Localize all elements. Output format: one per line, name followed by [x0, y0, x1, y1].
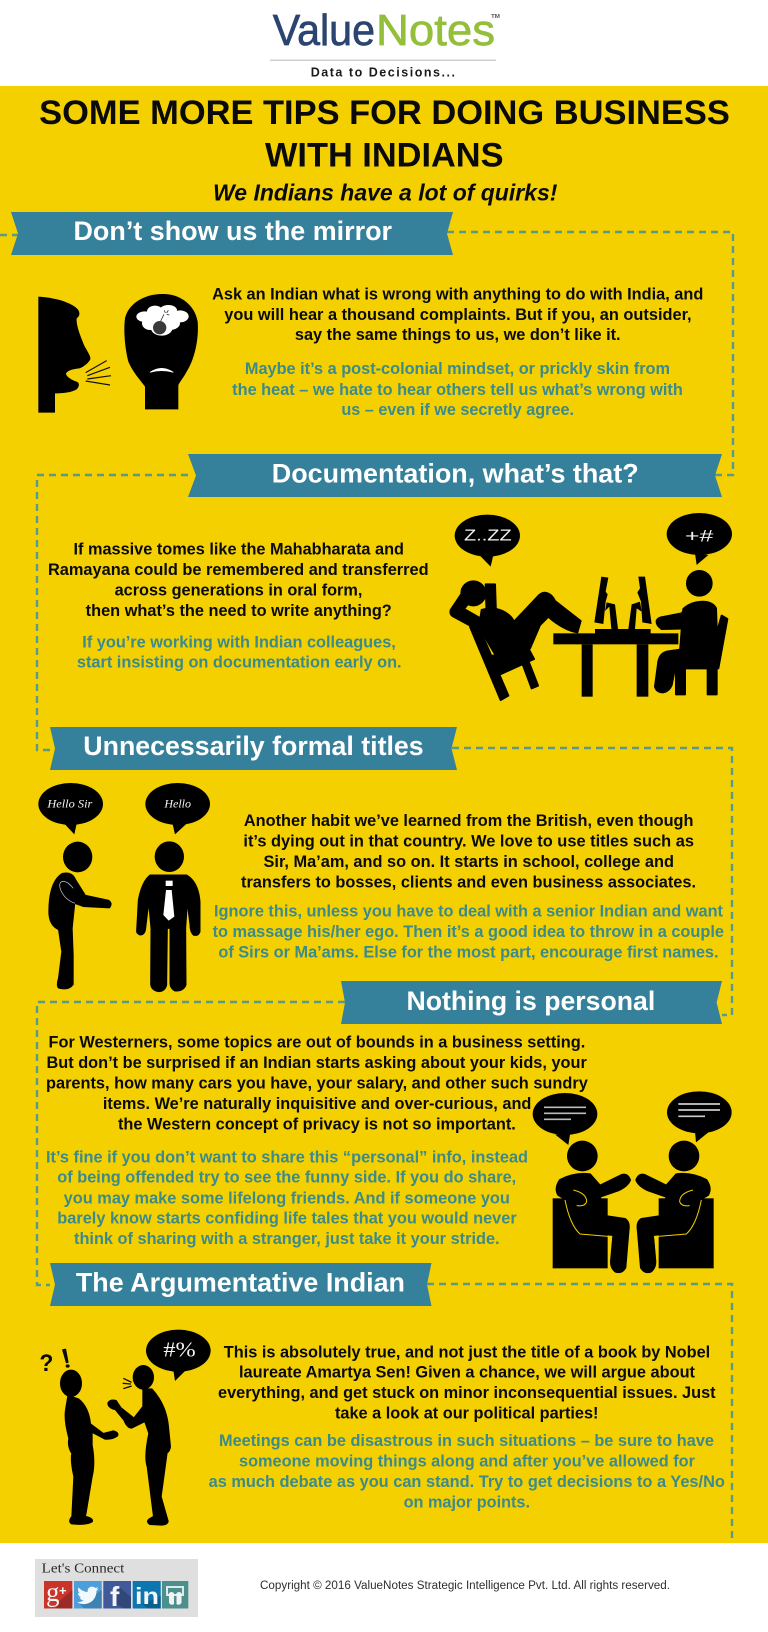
banner: formal titles: [50, 727, 457, 770]
text: argumentative advice: [209, 1432, 725, 1511]
banner: argumentative: The Argumentative Indian: [76, 1268, 405, 1298]
figure: right seated person: [636, 1141, 714, 1272]
text: titles advice: Ignore this, unless you have to deal with a senior Indian and want: [214, 903, 724, 921]
banner: documentation: Documentation, what’s that?: [272, 458, 639, 488]
tagline: Data to Decisions...: [311, 66, 455, 80]
text: personal advice: think of sharing with a stranger, just take it your stride.: [74, 1230, 500, 1248]
text: documentation main: across generations in oral form,: [115, 581, 362, 599]
text: titles main: transfers to bosses, clients and even business associates.: [241, 873, 696, 891]
speech bubble: Hello Sir: [38, 783, 103, 834]
text: personal advice: barely know starts confiding life tales that you would never: [57, 1210, 517, 1228]
text: mirror main: you will hear a thousand complaints. But if you, an outsider,: [224, 306, 692, 324]
banner: documentation: [188, 454, 722, 497]
text: personal advice: [46, 1148, 528, 1248]
text: argumentative main: laureate Amartya Sen! Given a chance, we will argue about: [239, 1364, 696, 1382]
icon: speaking face and frowning head with bomb thought: [38, 294, 198, 413]
title: SOME MORE TIPS FOR DOING BUSINESS: [39, 94, 730, 132]
speech bubble: left: [533, 1093, 597, 1145]
text: titles advice: of Sirs or Ma’ams. Else for the most part, encourage first names.: [218, 943, 718, 961]
text: mirror main: Ask an Indian what is wrong with anything to do with India, and: [212, 286, 703, 304]
banner: mirror: [11, 212, 453, 255]
icon: Twitter: [74, 1581, 102, 1608]
footer: copyright: Copyright © 2016 ValueNotes Strategic Intelligence Pvt. Ltd. All rights reserved.: [260, 1580, 670, 1592]
icon: two office workers at desk: [450, 513, 732, 700]
text: argumentative main: everything, and get stuck on minor inconsequential issues. Just: [218, 1384, 716, 1402]
text: documentation advice: start insisting on documentation early on.: [77, 654, 402, 672]
text: personal main: items. We’re naturally inquisitive and over-curious, and: [103, 1095, 531, 1113]
desk and monitors: [553, 577, 678, 697]
label: Let's Connect: Let's Connect: [42, 1561, 124, 1576]
symbols: question and exclamation marks: ?: [39, 1350, 53, 1377]
speech bubble: Hello: Hello: [163, 798, 191, 810]
icon: Google Plus: +: [59, 1583, 67, 1598]
icon: Facebook: [103, 1581, 131, 1612]
panel: Documentation, what's that?: [48, 454, 732, 700]
figure: reclining man: [450, 581, 581, 700]
icon: two people seated in conversation: [533, 1091, 732, 1272]
icon: LinkedIn: [133, 1581, 161, 1609]
text: titles main: Sir, Ma’am, and so on. It starts in school, college and: [264, 853, 674, 871]
speech bubble: Hello: [145, 783, 210, 834]
banner: argumentative: [50, 1263, 432, 1306]
banner: nothing is personal: [341, 981, 722, 1024]
subtitle: We Indians have a lot of quirks!: [213, 180, 558, 206]
panel: Unnecessarily formal titles: [38, 727, 724, 992]
title: [39, 94, 730, 175]
title: WITH INDIANS: [265, 137, 504, 175]
panel: The Argumentative Indian: [39, 1263, 725, 1525]
text: argumentative advice: on major points.: [404, 1493, 530, 1511]
banner: formal titles: Unnecessarily formal titles: [83, 731, 424, 761]
figure: confused listener: [61, 1371, 117, 1524]
icon: Google Plus: g: [46, 1577, 60, 1607]
logo wordmark: [273, 6, 500, 55]
text: titles main: Another habit we’ve learned from the British, even though: [244, 812, 694, 830]
icon: two people arguing: [39, 1330, 211, 1525]
footer: social box: [35, 1559, 198, 1617]
logo header: [270, 6, 500, 80]
icon: LinkedIn: in: [135, 1583, 159, 1609]
text: titles advice: [213, 903, 724, 961]
text: titles main: [241, 812, 696, 891]
text: documentation main: [48, 541, 429, 620]
text: personal advice: It’s fine if you don’t want to share this “personal” info, instead: [46, 1148, 528, 1166]
text: mirror advice: Maybe it’s a post-colonial mindset, or prickly skin from: [245, 360, 670, 378]
text: argumentative main: [218, 1343, 716, 1422]
symbols: question and exclamation marks: [39, 1349, 70, 1377]
text: mirror advice: [232, 360, 683, 419]
panel: Don't show us the mirror: [11, 212, 703, 419]
text: titles main: it’s dying out in that country. We love to use titles such as: [243, 833, 694, 851]
text: argumentative advice: Meetings can be disastrous in such situations – be sure to have: [219, 1432, 714, 1450]
figure: man offering handshake: [49, 842, 111, 988]
text: personal main: [46, 1034, 588, 1133]
text: documentation main: Ramayana could be remembered and transferred: [48, 561, 429, 579]
speech bubble: #%: [146, 1330, 211, 1381]
text: mirror main: say the same things to us, we don’t like it.: [295, 326, 621, 344]
icon: Google Plus: [44, 1577, 72, 1608]
icon: two men greeting: [38, 783, 210, 992]
figure: shouting person: [108, 1365, 170, 1525]
figure: left seated person: [553, 1141, 630, 1272]
banner: nothing is personal: Nothing is personal: [406, 986, 655, 1016]
text: mirror advice: us – even if we secretly agree.: [341, 401, 574, 419]
text: personal advice: you may make some lifelong friends. And if someone you: [64, 1189, 510, 1207]
logo wordmark: Value: [273, 6, 375, 55]
text: personal main: the Western concept of privacy is not so important.: [118, 1115, 516, 1133]
text: documentation main: then what’s the need to write anything?: [86, 602, 392, 620]
speech bubble: #%: #%: [163, 1338, 196, 1362]
text: mirror main: [212, 286, 703, 344]
text: argumentative advice: as much debate as you can stand. Try to get decisions to a Yes/No: [209, 1473, 725, 1491]
speech bubble: typing: [667, 513, 732, 565]
speech bubble: typing: +#: [685, 527, 714, 546]
text: argumentative main: This is absolutely true, and not just the title of a book by Nobel: [224, 1343, 710, 1361]
banner: mirror: Don’t show us the mirror: [74, 216, 392, 246]
figure: man in suit and tie: [137, 841, 200, 992]
panel: Nothing is personal: [46, 981, 732, 1272]
speech bubble: snoring: Z..ZZ: [464, 528, 512, 545]
text: mirror advice: the heat – we hate to hear others tell us what’s wrong with: [232, 381, 683, 399]
logo wordmark: TM: [491, 14, 500, 20]
logo wordmark: Notes: [376, 6, 495, 55]
text: titles advice: to massage his/her ego. Then it’s a good idea to throw in a couple: [213, 923, 724, 941]
icon: SlideShare: [162, 1581, 188, 1608]
text: documentation advice: [77, 633, 402, 672]
text: documentation main: If massive tomes like the Mahabharata and: [74, 541, 404, 559]
speech bubble: right: [667, 1091, 732, 1142]
text: personal advice: of being offended try to see the funny side. If you do share,: [57, 1169, 516, 1187]
icon: Facebook: f: [110, 1581, 120, 1612]
text: argumentative advice: someone moving things along and after you’ve allowed for: [239, 1453, 696, 1471]
text: argumentative main: take a look at our political parties!: [335, 1404, 598, 1422]
text: personal main: But don’t be surprised if an Indian starts asking about your kids, your: [46, 1054, 587, 1072]
text: personal main: parents, how many cars you have, your salary, and other such sundry: [46, 1074, 588, 1092]
speech bubble: snoring: [455, 515, 520, 567]
text: personal main: For Westerners, some topics are out of bounds in a business setting.: [48, 1034, 585, 1052]
text: documentation advice: If you’re working with Indian colleagues,: [82, 633, 396, 651]
speech bubble: Hello Sir: Hello Sir: [46, 798, 93, 810]
figure: working man: [655, 571, 727, 694]
